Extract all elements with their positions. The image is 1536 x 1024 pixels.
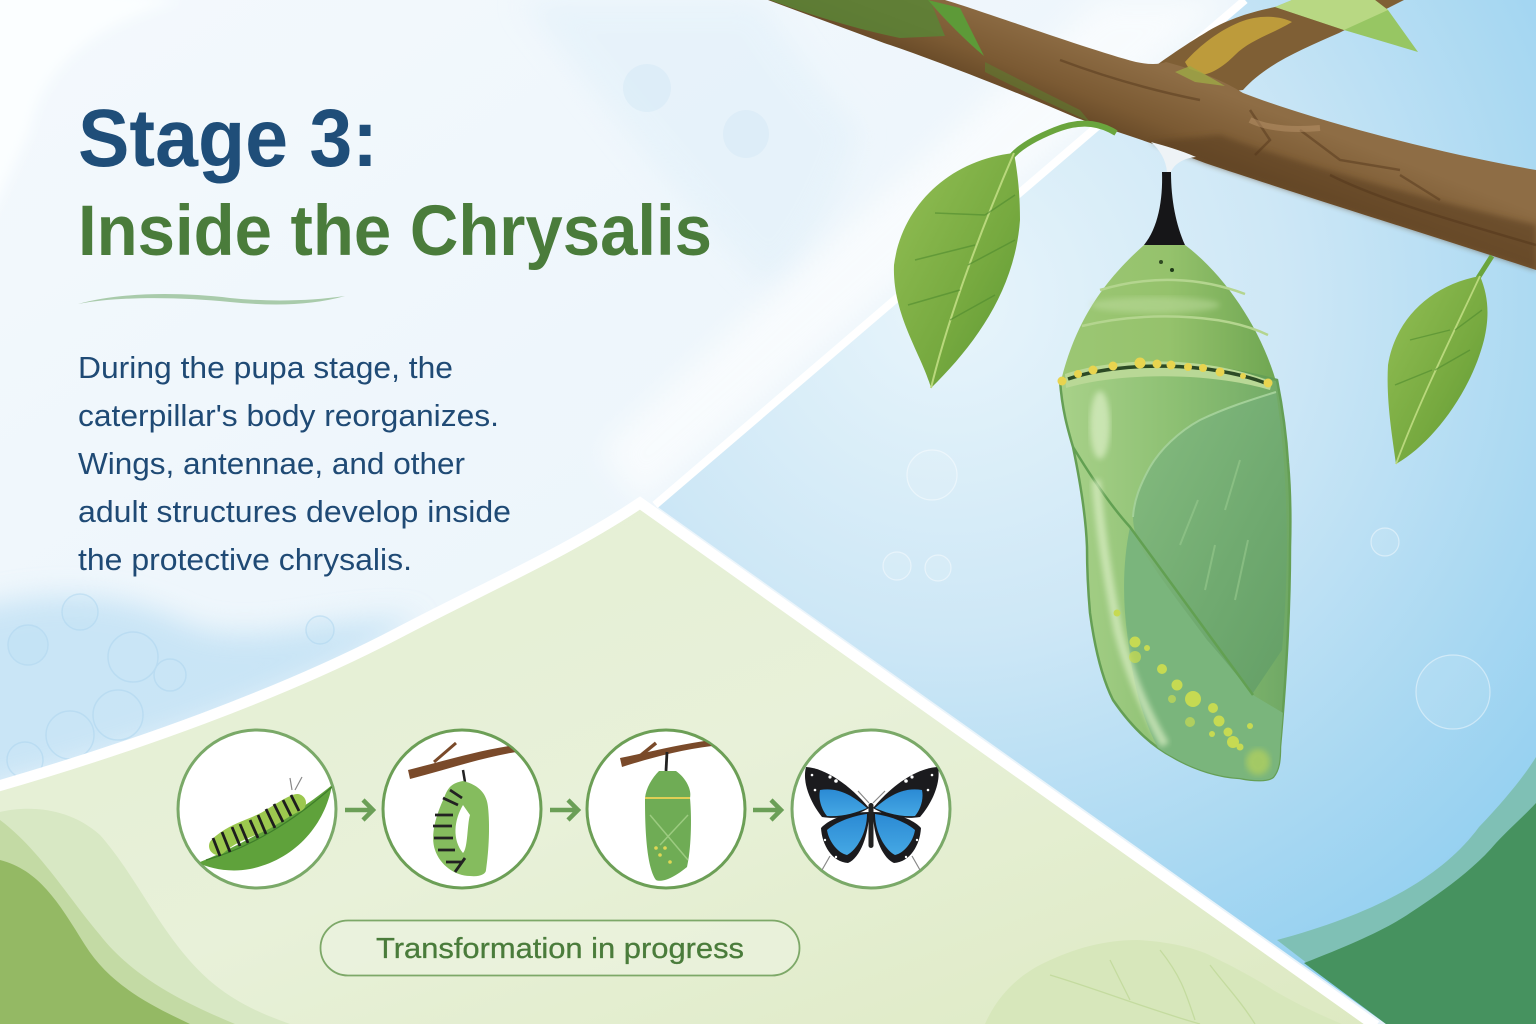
icon: caterpillar on leaf: [178, 730, 336, 888]
title: Inside the Chrysalis: [78, 192, 712, 271]
panel: bottom-right green corner: [1277, 757, 1536, 1024]
description text: the protective chrysalis.: [78, 542, 412, 577]
icon: left leaf: [894, 124, 1116, 388]
title: Stage 3:: [78, 93, 378, 184]
description text: [78, 350, 511, 577]
icon: arrow 2: [550, 800, 578, 820]
description text: caterpillar's body reorganizes.: [78, 398, 499, 433]
illustration: main chrysalis: [1058, 142, 1295, 790]
title: [78, 93, 712, 271]
title underline swoosh: [78, 294, 345, 304]
panel: blue chrysalis background: [655, 0, 1536, 1024]
label: transformation in progress: [320, 920, 800, 976]
description text: During the pupa stage, the: [78, 350, 453, 385]
icon: right leaf: [1388, 256, 1492, 464]
label: transformation in progress: Transformation in progress: [376, 933, 744, 965]
icon: top leaves on branch: [928, 0, 1418, 56]
icon: caterpillar forming chrysalis: [383, 730, 541, 888]
icon: arrow 1: [345, 800, 373, 820]
description text: Wings, antennae, and other: [78, 446, 465, 481]
description text: adult structures develop inside: [78, 494, 511, 529]
icon: blue butterfly: [792, 730, 950, 888]
icon: small chrysalis: [587, 730, 745, 888]
branch with side twig: [768, 0, 1536, 270]
panel: green transformation area: [0, 503, 1376, 1024]
icon: arrow 3: [753, 800, 781, 820]
